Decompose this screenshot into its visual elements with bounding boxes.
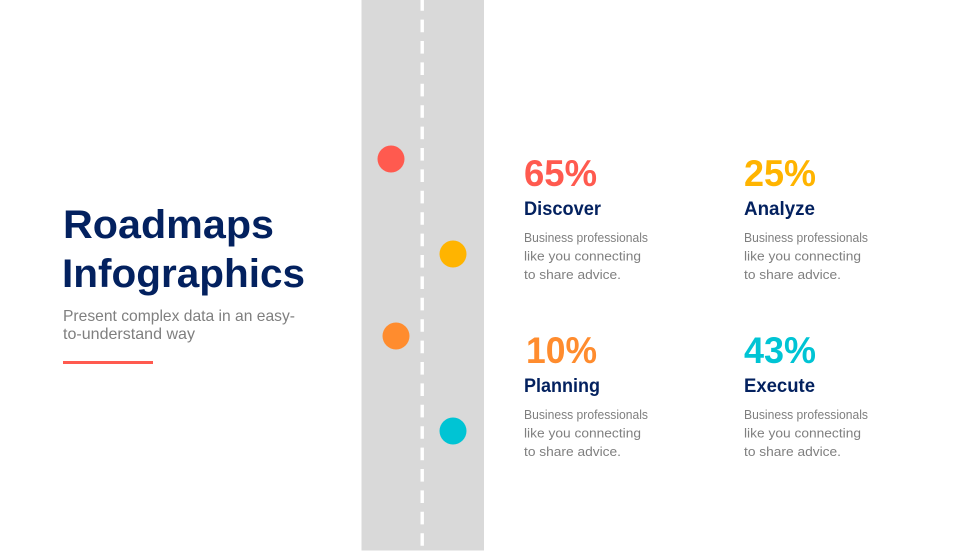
panel: analyze xyxy=(744,153,868,282)
subtitle xyxy=(63,308,295,343)
subtitle: to-understand way xyxy=(63,326,195,343)
heading: execute: Execute xyxy=(744,376,815,397)
panel: title block xyxy=(62,203,305,364)
body text: execute: like you connecting xyxy=(744,426,861,440)
body text: analyze: like you connecting xyxy=(744,248,861,264)
body text: analyze: Business professionals xyxy=(744,230,868,245)
road surface xyxy=(362,0,484,550)
heading: analyze: Analyze xyxy=(744,199,815,220)
body text: planning xyxy=(524,407,648,459)
title: Infographics xyxy=(62,252,305,296)
body text: planning: to share advice. xyxy=(524,444,621,459)
body text: execute: to share advice. xyxy=(744,444,841,459)
stat: 25%: 25% xyxy=(744,153,816,194)
marker: execute xyxy=(440,418,466,444)
body text: analyze xyxy=(744,230,868,282)
body text: discover: like you connecting xyxy=(524,248,641,264)
heading: planning: Planning xyxy=(524,376,600,397)
title xyxy=(62,203,305,296)
heading: discover: Discover xyxy=(524,199,602,220)
body text: execute xyxy=(744,407,868,459)
body text: execute: Business professionals xyxy=(744,407,868,422)
road graphic xyxy=(362,0,484,550)
body text: discover: Business professionals xyxy=(524,230,648,245)
stat: 65%: 65% xyxy=(524,153,597,194)
panel: planning xyxy=(524,330,648,459)
body text: discover: to share advice. xyxy=(524,267,621,282)
stat: 10%: 10% xyxy=(526,330,597,371)
body text: planning: Business professionals xyxy=(524,407,648,422)
body text: analyze: to share advice. xyxy=(744,267,841,282)
marker: discover xyxy=(378,146,404,172)
panel: execute xyxy=(744,330,868,459)
stat: 43%: 43% xyxy=(744,330,816,371)
accent underline xyxy=(63,361,153,364)
panel: discover xyxy=(524,153,648,282)
marker: analyze xyxy=(440,240,466,268)
title: Roadmaps xyxy=(63,203,274,247)
marker: planning xyxy=(382,322,410,350)
subtitle: Present complex data in an easy- xyxy=(63,308,295,325)
body text: discover xyxy=(524,230,648,282)
body text: planning: like you connecting xyxy=(524,426,641,440)
